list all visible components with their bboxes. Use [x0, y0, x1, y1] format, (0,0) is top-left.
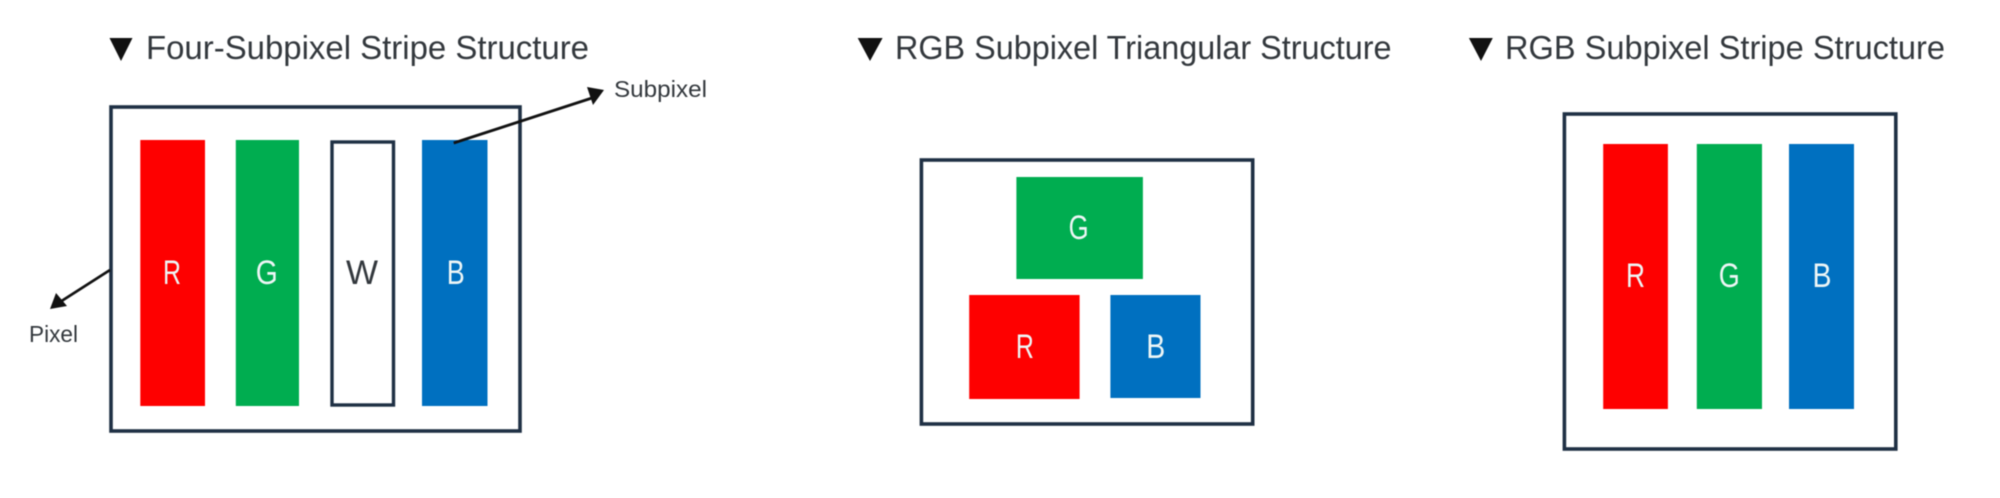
subpixel G	[1016, 177, 1143, 279]
subpixel G: G	[1719, 257, 1740, 295]
arrow to subpixel label	[454, 87, 604, 143]
subpixel G: G	[1069, 209, 1089, 247]
subpixel W	[332, 142, 394, 405]
subpixel B	[1789, 144, 1854, 409]
subpixel B: B	[1812, 257, 1832, 295]
heading: four-subpixel: Four-Subpixel Stripe Structure	[146, 29, 589, 66]
subpixel G	[236, 140, 299, 406]
subpixel B: B	[447, 254, 465, 292]
arrow to pixel label	[50, 270, 110, 309]
subpixel G	[1697, 144, 1762, 409]
label: subpixel: Subpixel	[614, 76, 707, 102]
subpixel B	[422, 140, 488, 406]
panel: RGB subpixel triangular structure	[858, 29, 1392, 424]
panel: RGB subpixel stripe structure	[1469, 29, 1945, 449]
pixel frame	[111, 107, 520, 431]
label: pixel: Pixel	[29, 321, 78, 347]
subpixel R: R	[163, 254, 181, 292]
subpixel R	[969, 295, 1080, 399]
heading: triangular: RGB Subpixel Triangular Structure	[895, 29, 1392, 66]
subpixel R	[140, 140, 205, 406]
subpixel R	[1603, 144, 1668, 409]
subpixel G: G	[256, 254, 278, 292]
subpixel W: W	[346, 254, 378, 292]
panel: four-subpixel stripe structure	[29, 29, 707, 431]
subpixel B: B	[1146, 328, 1165, 366]
subpixel R: R	[1016, 328, 1034, 366]
pixel frame	[921, 160, 1253, 424]
subpixel B	[1110, 295, 1200, 398]
pixel frame	[1564, 114, 1896, 449]
subpixel R: R	[1626, 257, 1645, 295]
heading: RGB stripe: RGB Subpixel Stripe Structure	[1505, 29, 1945, 66]
